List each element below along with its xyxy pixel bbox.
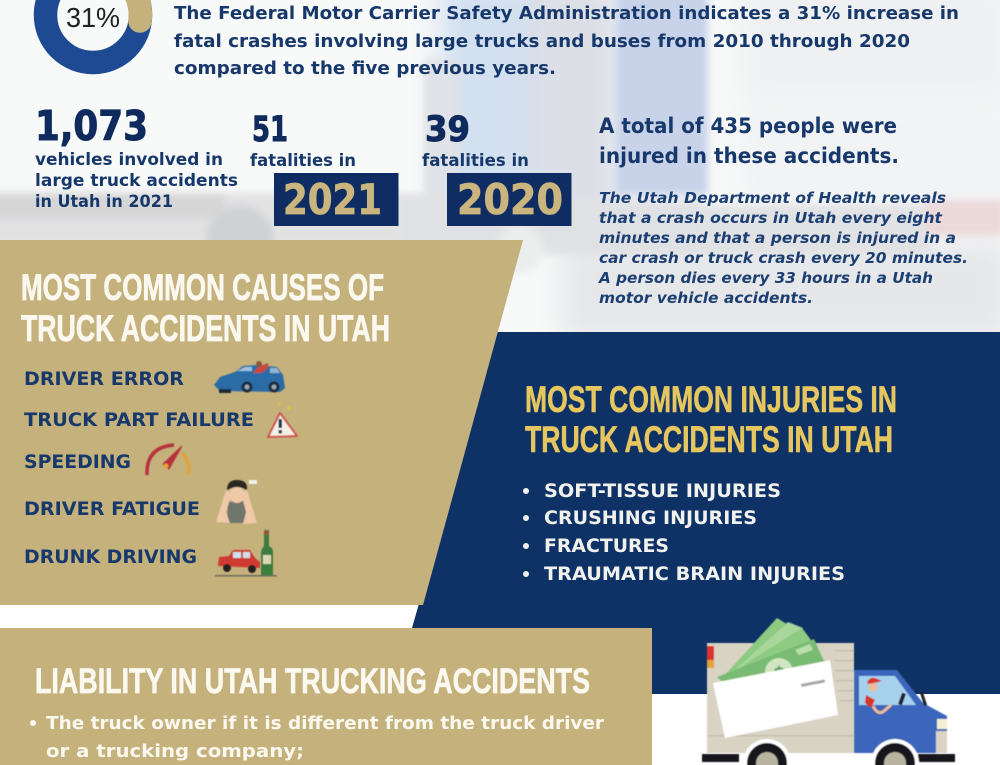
icon: car and bottle bbox=[215, 530, 277, 576]
list: causes: SPEEDING bbox=[24, 452, 131, 473]
stat: 1,073 vehicles: 1,073 bbox=[35, 102, 148, 150]
text block: Utah Department of Health: The Utah Department of Health reveals bbox=[599, 189, 946, 207]
text block: federal statistic bbox=[174, 3, 959, 79]
stat: 1,073 vehicles: large truck accidents bbox=[35, 171, 238, 191]
icon: blue car with driver bbox=[214, 361, 285, 393]
icon: warning triangle bbox=[268, 402, 297, 437]
text block: federal statistic: compared to the five previous years. bbox=[174, 58, 556, 79]
heading: causes: MOST COMMON CAUSES OF bbox=[21, 267, 384, 308]
list: liable parties: The truck owner if it is different from the truck driver bbox=[46, 713, 604, 734]
stat: 51 fatalities in 2021 bbox=[250, 110, 398, 226]
list: liable parties: or a trucking company; bbox=[46, 741, 304, 762]
stat: 39 fatalities in 2020: 2020 bbox=[457, 175, 563, 224]
list: causes bbox=[24, 369, 254, 568]
stat: 1,073 vehicles: vehicles involved in bbox=[35, 150, 223, 170]
list: causes: DRIVER ERROR bbox=[24, 369, 184, 390]
list: causes: DRIVER FATIGUE bbox=[24, 499, 200, 520]
stat: 39 fatalities in 2020: 39 bbox=[425, 110, 470, 150]
text block: Utah Department of Health: motor vehicle accidents. bbox=[599, 289, 813, 307]
panel: causes of truck accidents bbox=[0, 240, 523, 605]
list: injuries: SOFT-TISSUE INJURIES bbox=[544, 481, 781, 502]
text block: Utah Department of Health: minutes and that a person is injured in a bbox=[599, 229, 956, 247]
text block: 435 injured: injured in these accidents. bbox=[599, 144, 899, 168]
icon: delivery truck with money envelope: $ bbox=[773, 663, 785, 684]
stat: 51 fatalities in 2021: 2021 bbox=[283, 175, 382, 224]
list: injuries: FRACTURES bbox=[544, 536, 669, 557]
text block: Utah Department of Health: car crash or truck crash every 20 minutes. bbox=[599, 249, 968, 267]
panel: liability bbox=[0, 628, 652, 765]
text block: federal statistic: fatal crashes involving large trucks and buses from 2010 through 2020 bbox=[174, 31, 910, 52]
text block: Utah Department of Health bbox=[598, 189, 968, 307]
icon: delivery truck with money envelope bbox=[702, 618, 955, 765]
list: injuries bbox=[523, 481, 845, 585]
list: causes: DRUNK DRIVING bbox=[24, 547, 197, 568]
text block: 435 injured: A total of 435 people were bbox=[599, 114, 897, 138]
list: causes: TRUCK PART FAILURE bbox=[24, 410, 254, 431]
panel: injuries navy background bbox=[412, 332, 1000, 694]
text block: 435 injured bbox=[599, 114, 899, 168]
stat: 51 fatalities in 2021: fatalities in bbox=[250, 151, 356, 171]
list: injuries: CRUSHING INJURIES bbox=[544, 508, 757, 529]
heading: causes: TRUCK ACCIDENTS IN UTAH bbox=[21, 308, 390, 349]
stat: 1,073 vehicles bbox=[35, 102, 238, 212]
heading: liability: LIABILITY IN UTAH TRUCKING ACCIDENTS bbox=[35, 662, 590, 701]
icon: speedometer bbox=[147, 445, 189, 475]
chart: 31% donut: 31% bbox=[66, 2, 120, 33]
panel: white strip and lower background bbox=[0, 600, 1000, 765]
list: liable parties bbox=[30, 713, 604, 762]
list: injuries: TRAUMATIC BRAIN INJURIES bbox=[544, 564, 845, 585]
heading: causes bbox=[21, 267, 390, 349]
icon: tired driver bbox=[216, 480, 257, 524]
stat: 39 fatalities in 2020: fatalities in bbox=[422, 151, 529, 171]
stat: 1,073 vehicles: in Utah in 2021 bbox=[35, 192, 173, 212]
text block: federal statistic: The Federal Motor Carrier Safety Administration indicates a 31% increase in bbox=[174, 3, 959, 24]
chart: 31% donut bbox=[46, 0, 140, 62]
background: faded truck photo bbox=[0, 0, 1000, 340]
heading: injuries bbox=[525, 379, 897, 460]
stat: 51 fatalities in 2021: 51 bbox=[252, 110, 288, 150]
text block: Utah Department of Health: that a crash occurs in Utah every eight bbox=[599, 209, 943, 227]
stat: 39 fatalities in 2020 bbox=[422, 110, 572, 226]
text block: Utah Department of Health: A person dies every 33 hours in a Utah bbox=[598, 269, 933, 287]
